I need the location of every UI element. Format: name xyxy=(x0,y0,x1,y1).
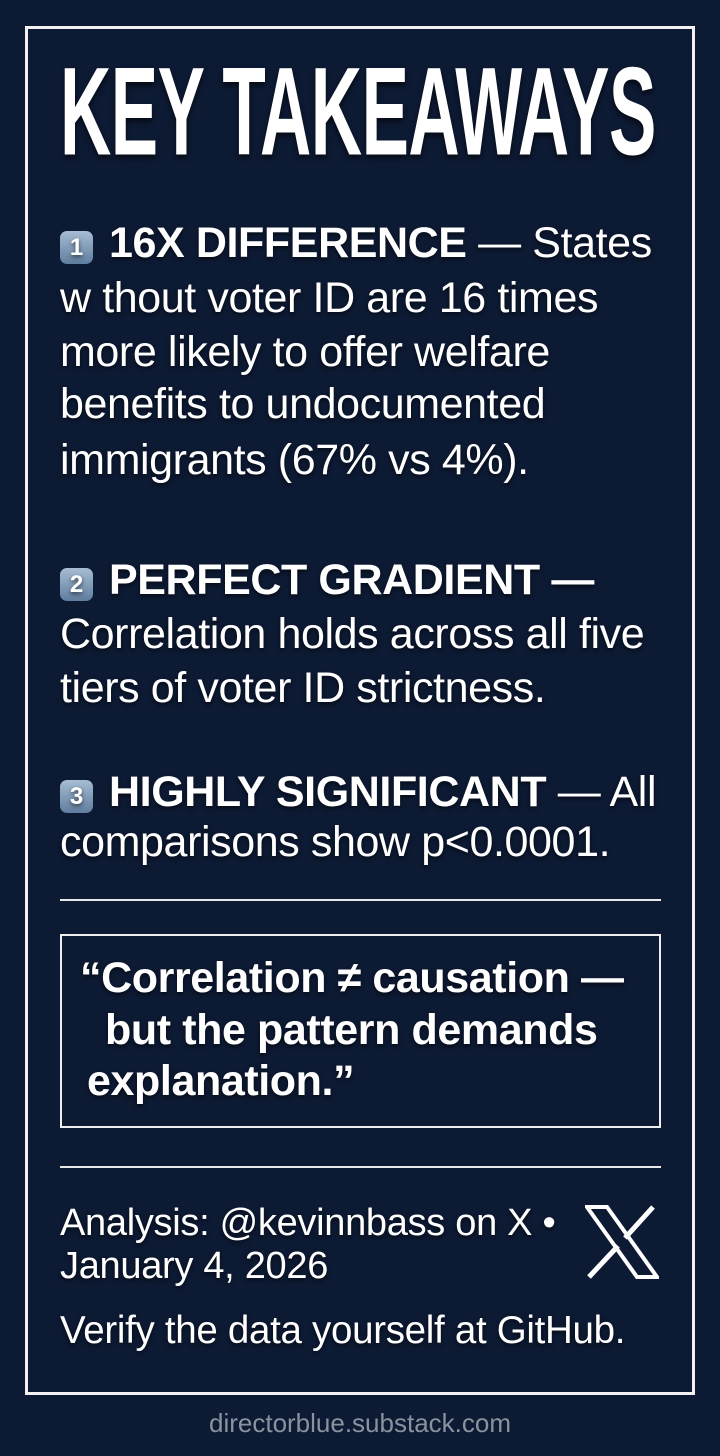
footer credit: January 4, 2026 xyxy=(60,1245,328,1287)
quote box: “Correlation ≠ causation — xyxy=(80,954,624,1002)
footer credit xyxy=(60,1202,625,1354)
takeaway 3: 3 xyxy=(70,783,83,810)
takeaway 2: Correlation holds across all five xyxy=(60,610,644,658)
quote box: explanation.” xyxy=(87,1057,354,1105)
takeaway 2: PERFECT GRADIENT — xyxy=(109,556,594,604)
quote box xyxy=(60,934,661,1128)
footer credit: Analysis: @kevinnbass on X • xyxy=(60,1202,556,1244)
takeaway 1: 16X DIFFERENCE — States xyxy=(109,219,652,267)
takeaway 1: benefits to undocumented xyxy=(60,380,545,428)
takeaway 1: w thout voter ID are 16 times xyxy=(60,274,598,322)
url: directorblue.substack.com xyxy=(209,1408,511,1438)
takeaway 3: comparisons show p<0.0001. xyxy=(60,818,610,866)
footer credit: Verify the data yourself at GitHub. xyxy=(60,1309,625,1352)
takeaway 1: immigrants (67% vs 4%). xyxy=(60,436,529,484)
takeaway 3: HIGHLY SIGNIFICANT — All xyxy=(109,768,656,816)
takeaway 2: tiers of voter ID strictness. xyxy=(60,664,545,712)
takeaway 3 xyxy=(60,768,656,868)
takeaway 1: more likely to offer welfare xyxy=(60,328,550,376)
title: KEY TAKEAWAYS xyxy=(60,43,656,182)
takeaway 1: 1 xyxy=(70,234,83,261)
takeaway 2: 2 xyxy=(70,571,83,598)
icon: X logo xyxy=(585,1205,659,1279)
quote box: but the pattern demands xyxy=(105,1006,598,1054)
takeaway 1 xyxy=(60,219,652,486)
takeaway 2 xyxy=(60,556,644,712)
